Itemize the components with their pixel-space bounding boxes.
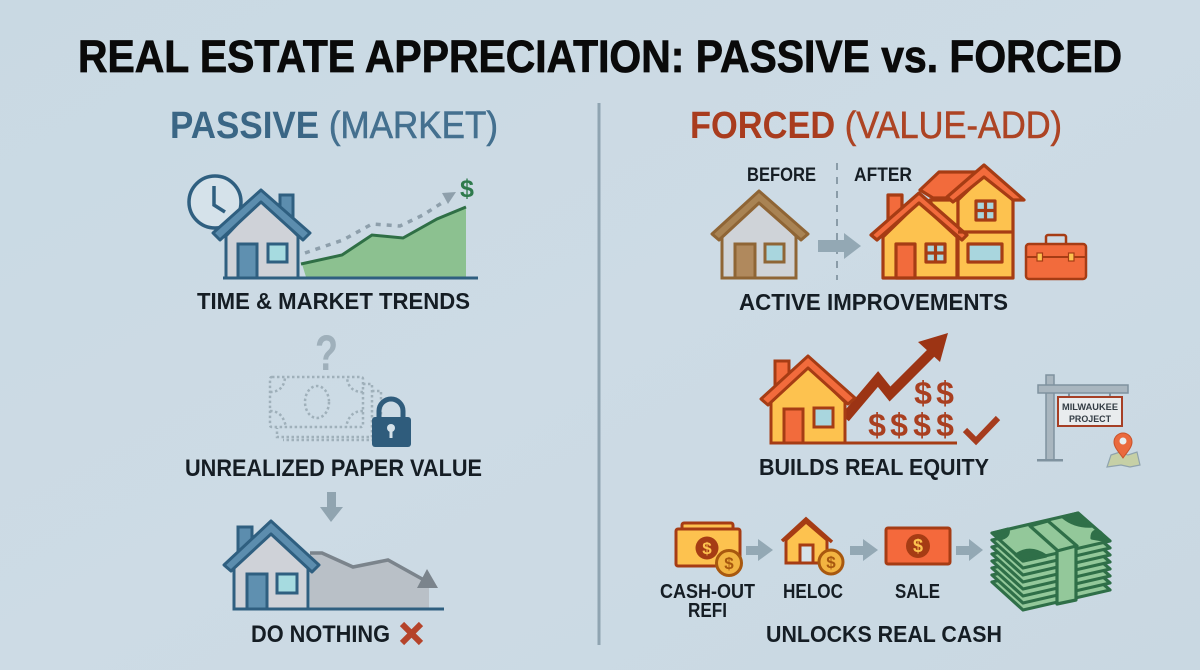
label: cash-out refi: REFI <box>688 600 727 622</box>
icon: dollar signs: $ <box>914 375 932 411</box>
label: active improvements: ACTIVE IMPROVEMENTS <box>739 289 1008 315</box>
icon: dollar signs: $ <box>936 375 954 411</box>
arrow: step two <box>850 539 878 561</box>
heading: passive: PASSIVE (MARKET) <box>170 105 498 147</box>
label: sale: SALE <box>895 581 940 603</box>
arrow: step three <box>956 539 983 561</box>
label: before: BEFORE <box>747 164 816 186</box>
icon: cash-out refi money: $ <box>724 554 734 573</box>
label: cash-out refi: CASH-OUT <box>660 581 755 603</box>
icon: milwaukee project sign: PROJECT <box>1069 414 1111 425</box>
chart: declining grey area <box>310 553 438 608</box>
arrow: down <box>320 492 343 522</box>
icon: house <box>224 521 319 609</box>
icon: house <box>761 356 855 443</box>
heading: forced: FORCED (VALUE-ADD) <box>690 105 1062 147</box>
chart: green market area <box>301 207 466 277</box>
icon: red cross <box>402 624 421 643</box>
label: do nothing: DO NOTHING <box>251 621 390 648</box>
icon: dollar signs: $ <box>913 407 931 443</box>
icon: question mark: ? <box>315 325 338 381</box>
label: cash-out refi <box>660 581 755 622</box>
icon: house with rising equity arrow <box>761 333 957 444</box>
icon: dollar signs: $ <box>868 407 886 443</box>
icon: before house <box>712 191 808 278</box>
label: unlocks real cash: UNLOCKS REAL CASH <box>766 621 1002 647</box>
arrow: before to after <box>818 233 861 259</box>
title: REAL ESTATE APPRECIATION: PASSIVE vs. FORCED <box>78 31 1122 82</box>
icon: heloc house <box>782 519 843 574</box>
icon: house with clock and rising market chart <box>189 175 478 280</box>
icon: dollar sign: $ <box>460 175 474 203</box>
icon: dotted paper money <box>270 377 381 440</box>
label: unrealized paper value: UNREALIZED PAPER VALUE <box>185 455 482 482</box>
icon: cash-out refi money: $ <box>702 539 712 558</box>
arrow: dotted trend <box>305 192 456 253</box>
icon: toolbox <box>1026 235 1086 279</box>
icon: sale banknote: $ <box>913 536 923 556</box>
icon: sale banknote <box>886 528 950 564</box>
icon: map pin <box>1107 433 1140 467</box>
label: after: AFTER <box>854 164 912 186</box>
icon: padlock <box>372 399 411 447</box>
icon: stack of cash <box>992 513 1110 610</box>
icon: milwaukee project sign: MILWAUKEE <box>1062 402 1118 413</box>
icon: dollar signs <box>868 375 954 443</box>
icon: house <box>213 190 310 278</box>
icon: heloc house: $ <box>826 553 836 572</box>
arrow: rising equity <box>845 333 948 418</box>
icon: clock <box>189 176 241 228</box>
icon: milwaukee project sign <box>1037 375 1128 462</box>
arrow: step one <box>746 539 773 561</box>
icon: cash-out refi money <box>676 523 742 576</box>
panel: forced <box>660 105 1140 647</box>
label: time and market trends: TIME & MARKET TRENDS <box>197 288 470 314</box>
label: builds real equity: BUILDS REAL EQUITY <box>759 454 989 480</box>
icon: after house <box>871 165 1024 278</box>
icon: dollar signs: $ <box>936 407 954 443</box>
icon: dollar signs: $ <box>890 407 908 443</box>
icon: check mark <box>965 418 998 441</box>
icon: house with declining chart <box>224 521 444 610</box>
label: heloc: HELOC <box>783 581 843 603</box>
panel: passive <box>170 105 498 648</box>
